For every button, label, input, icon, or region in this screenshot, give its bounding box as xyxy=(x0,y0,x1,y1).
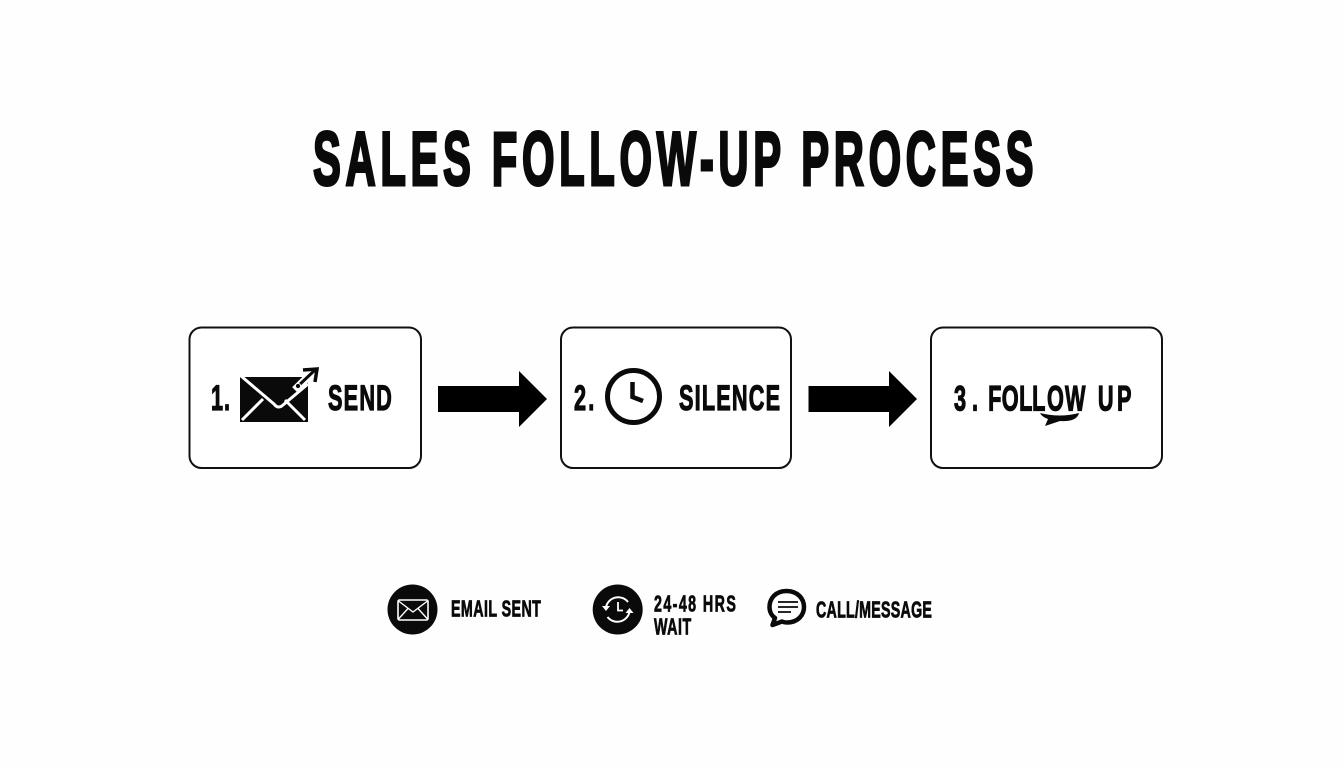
step 1 label: SEND xyxy=(328,380,392,418)
panel: step 3 follow up xyxy=(931,328,1162,468)
legend label: EMAIL SENT xyxy=(451,597,541,623)
legend label: CALL/MESSAGE xyxy=(816,598,932,624)
arrow: silence to follow up xyxy=(808,371,917,427)
icon: clock xyxy=(608,370,660,422)
icon: speech bubble under text xyxy=(1040,413,1079,426)
legend: wait time xyxy=(593,584,736,641)
icon: clock with cycle arrows badge xyxy=(593,584,643,634)
title: SALES FOLLOW-UP PROCESS xyxy=(313,116,1033,201)
step 1 number: 1. xyxy=(211,380,230,418)
arrow: send to silence xyxy=(438,371,547,427)
panel: step 2 silence xyxy=(561,328,791,468)
panel: step 1 send xyxy=(190,328,421,468)
step 3 label: 3. FOLLOW UP xyxy=(954,380,1132,419)
step 2 label: SILENCE xyxy=(679,380,780,418)
icon: speech bubble xyxy=(770,591,804,625)
icon: envelope badge xyxy=(388,584,438,634)
legend label: wait: WAIT xyxy=(654,615,691,641)
icon: envelope with outgoing arrow xyxy=(240,369,317,422)
legend: call or message xyxy=(770,591,932,625)
legend: email sent xyxy=(388,584,541,634)
legend label: hours: 24-48 HRS xyxy=(654,592,736,618)
step 2 number: 2. xyxy=(574,380,594,418)
